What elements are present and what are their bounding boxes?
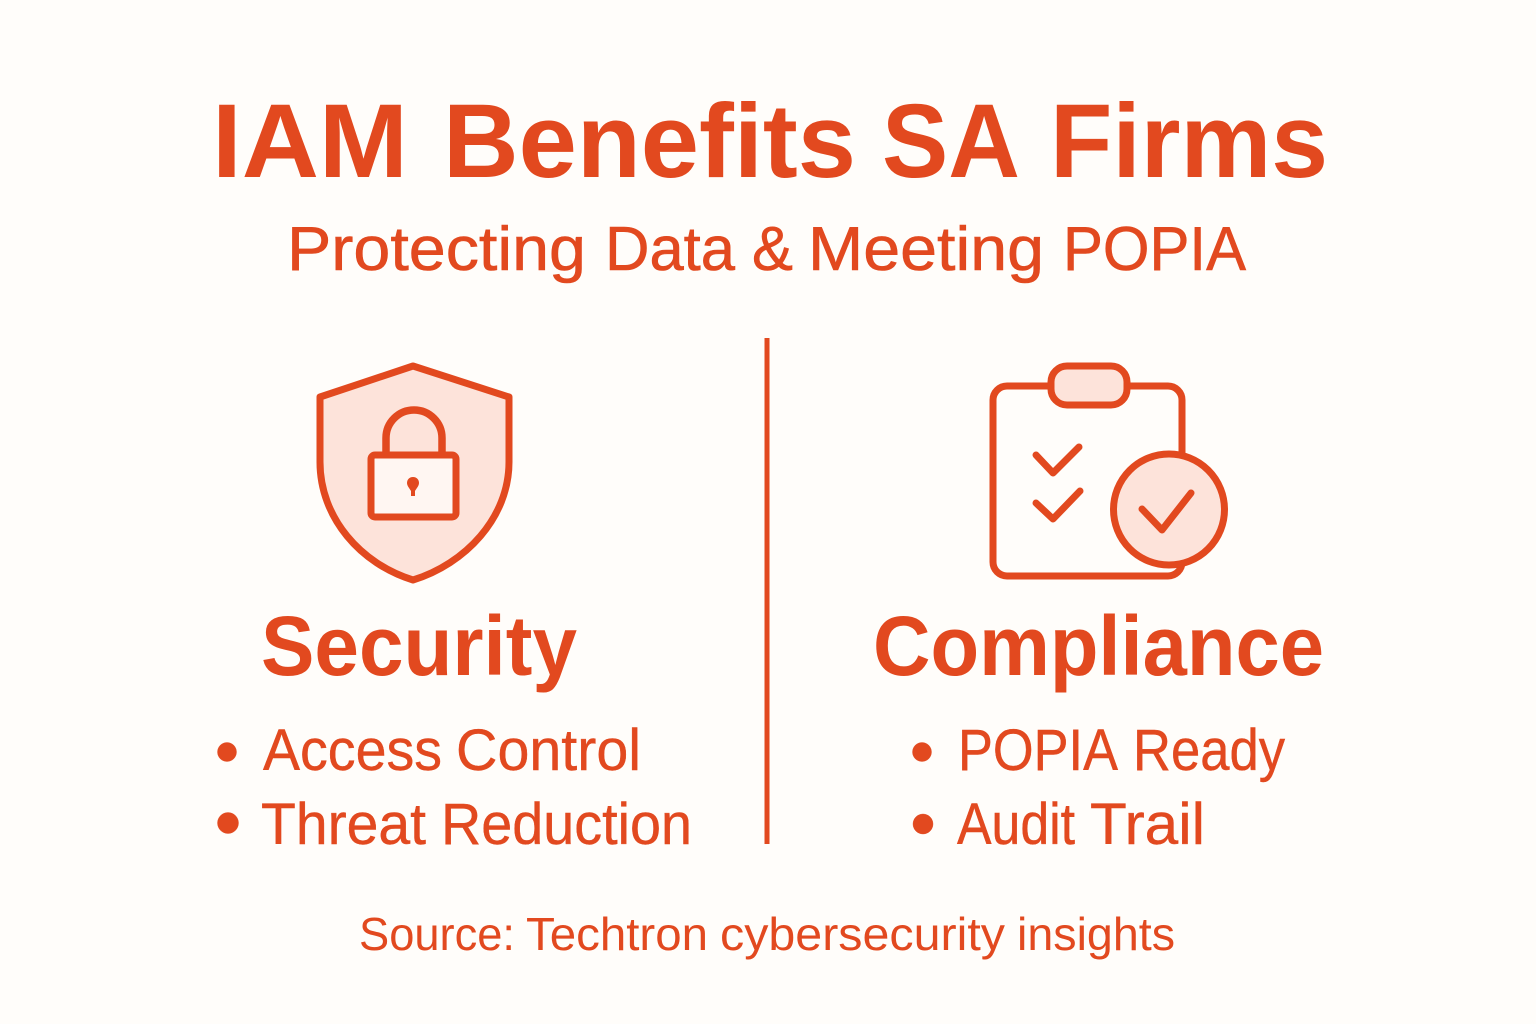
icon: shield with padlock [320, 366, 509, 580]
source line: Techtron [526, 908, 708, 960]
bullet list: security [218, 718, 692, 857]
subtitle: POPIA [1063, 215, 1247, 284]
subtitle [287, 215, 1247, 284]
title [212, 83, 1328, 200]
source line: Source: [359, 908, 515, 960]
center divider [764, 338, 770, 844]
heading: security: Security [261, 599, 577, 693]
bullet list: security: Threat [261, 792, 426, 857]
title: SA [882, 83, 1020, 200]
title: IAM [212, 83, 408, 200]
subtitle: & [752, 215, 793, 284]
bullet list: security: Access [263, 718, 442, 783]
panel: compliance [873, 366, 1324, 857]
bullet list: security: Reduction [441, 792, 692, 857]
heading: compliance: Compliance [873, 599, 1324, 693]
icon: clipboard with check badge [993, 366, 1224, 576]
bullet list: compliance: POPIA [958, 718, 1118, 783]
source line: cybersecurity [720, 908, 1005, 960]
subtitle: Protecting [287, 215, 586, 284]
title: Benefits [443, 83, 856, 200]
source line: insights [1017, 908, 1175, 960]
bullet list: compliance [912, 718, 1285, 857]
subtitle: Data [605, 215, 736, 284]
title: Firms [1050, 83, 1328, 200]
panel: security [218, 366, 692, 857]
bullet list: compliance: Ready [1133, 718, 1285, 783]
subtitle: Meeting [808, 215, 1044, 284]
bullet list: compliance: Audit [957, 792, 1075, 857]
source line [359, 908, 1175, 960]
bullet list: compliance: Trail [1090, 792, 1205, 857]
bullet list: security: Control [456, 718, 641, 783]
